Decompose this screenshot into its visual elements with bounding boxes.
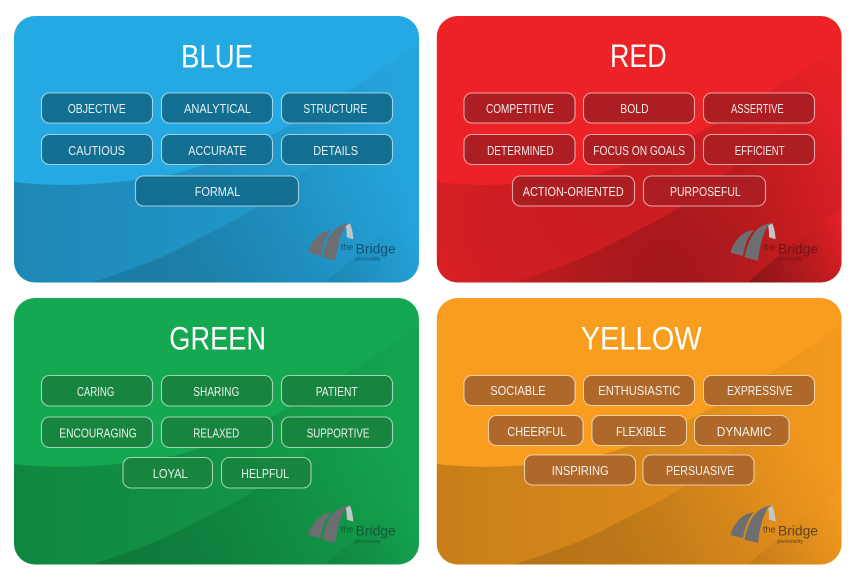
trait: expressive: EXPRESSIVE [727,383,793,398]
trait: purposeful [644,176,766,206]
trait: sharing [162,376,272,406]
trait: assertive [704,93,814,123]
logo: the bridge personality: the [341,242,353,253]
heading: green: GREEN [169,320,266,356]
trait: accurate [162,134,272,164]
trait: determined [464,134,575,164]
trait: structure [282,93,392,123]
trait: details [282,134,392,164]
trait: loyal: LOYAL [153,466,188,481]
trait: inspiring [524,455,636,485]
trait: efficient: EFFICIENT [735,143,785,158]
trait: patient [282,376,392,406]
logo: the bridge personality: the [763,524,776,535]
panel: yellow [437,298,842,565]
trait: encouraging [42,417,152,448]
panel: green [14,298,419,565]
logo: the bridge personality: personality [777,257,804,263]
heading: red: RED [610,38,667,74]
trait: supportive [282,417,392,448]
trait: patient: PATIENT [316,384,358,399]
trait: assertive: ASSERTIVE [731,101,784,116]
logo: the bridge personality: the [763,242,776,253]
trait: objective: OBJECTIVE [68,101,126,116]
trait: persuasive: PERSUASIVE [666,463,735,478]
trait: bold: BOLD [620,101,649,116]
card background: yellow [437,298,842,565]
heading: yellow: YELLOW [581,320,702,356]
heading: blue: BLUE [181,38,253,74]
trait: sharing: SHARING [193,384,239,399]
trait: enthusiastic: ENTHUSIASTIC [598,383,680,398]
logo: the bridge personality: personality [777,539,804,545]
logo: the bridge personality: personality [355,257,381,263]
logo: the bridge personality: Bridge [356,241,396,256]
trait: objective [42,93,152,123]
logo: the bridge personality: personality [355,539,381,545]
trait: determined: DETERMINED [487,143,554,158]
trait: cheerful: CHEERFUL [507,424,566,439]
trait: relaxed: RELAXED [193,426,239,440]
trait: flexible [592,416,686,446]
trait: focus on goals: FOCUS ON GOALS [593,143,685,158]
trait: caring [42,376,152,406]
trait: action-oriented [512,176,634,206]
trait: sociable [464,376,575,406]
trait: formal: FORMAL [195,184,240,199]
card background: green [14,298,419,565]
trait: details: DETAILS [313,143,358,158]
trait: sociable: SOCIABLE [490,383,546,398]
trait: expressive [704,376,814,406]
card background: blue [14,16,419,283]
trait: cheerful [488,416,583,446]
trait: cautious: CAUTIOUS [68,143,125,158]
trait: dynamic [694,416,789,446]
trait: competitive: COMPETITIVE [486,101,554,116]
logo: the bridge personality: Bridge [778,241,818,256]
logo: the bridge personality: Bridge [356,524,396,539]
trait: inspiring: INSPIRING [552,463,609,478]
trait: supportive: SUPPORTIVE [307,426,370,440]
logo: the bridge personality [730,506,818,545]
trait: enthusiastic [584,376,694,406]
logo: the bridge personality: Bridge [778,524,818,539]
logo: the bridge personality: the [341,524,353,535]
trait: formal [136,176,298,206]
trait: analytical [162,93,272,123]
trait: analytical: ANALYTICAL [184,101,251,116]
trait: relaxed [162,417,272,448]
logo: the bridge personality [730,223,818,263]
trait: helpful [222,458,311,488]
trait: dynamic: DYNAMIC [717,424,772,439]
trait: helpful: HELPFUL [241,466,289,481]
trait: caring: CARING [77,384,114,399]
card background: red [437,16,842,283]
trait: competitive [464,93,575,123]
panel: red [437,16,842,283]
trait: structure: STRUCTURE [303,101,368,116]
trait: focus on goals [584,134,694,164]
logo: the bridge personality [308,506,396,545]
trait: cautious [42,134,152,164]
panel: blue [14,16,419,283]
trait: accurate: ACCURATE [188,143,247,158]
trait: purposeful: PURPOSEFUL [670,184,741,199]
trait: encouraging: ENCOURAGING [59,426,137,440]
trait: efficient [704,134,814,164]
logo: the bridge personality [308,223,396,263]
trait: persuasive [643,455,754,485]
trait: bold [584,93,694,123]
trait: action-oriented: ACTION-ORIENTED [523,184,624,199]
trait: loyal [123,458,212,488]
trait: flexible: FLEXIBLE [616,424,666,439]
